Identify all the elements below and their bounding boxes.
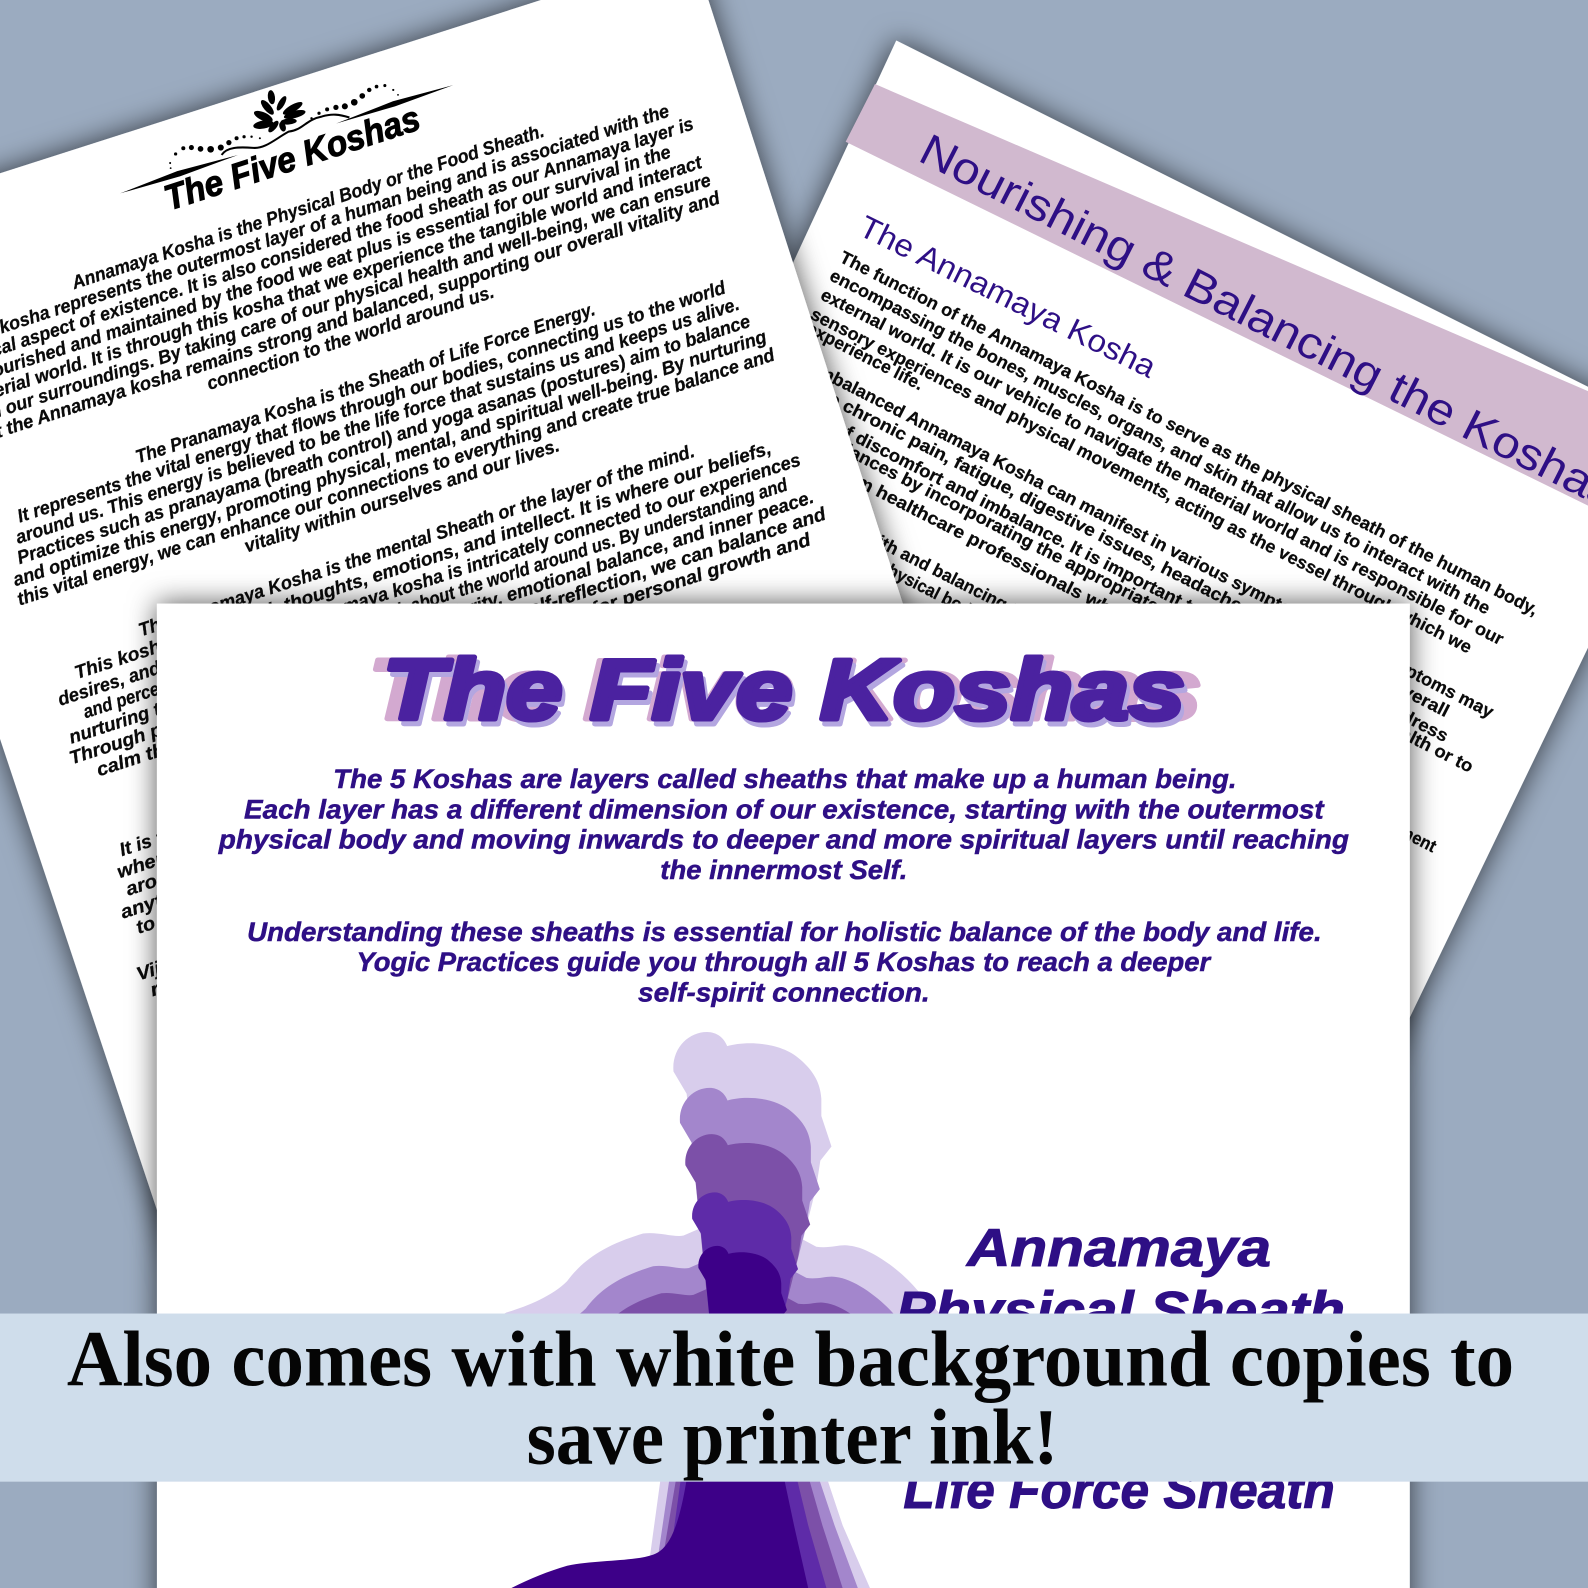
label: Life Force Sheath: Life Force Sheath (903, 1461, 1335, 1520)
text blocks: kosha descriptions: Through practices like meditation, breathwork and self-reflection, we can balance and (67, 503, 829, 768)
silhouette layer 5: darkest (506, 1246, 866, 1588)
text block: Annamaya function and imbalance: An imbalanced Annamaya Kosha can manifest in various symptoms. These symptoms may (784, 345, 1497, 722)
label: Annamaya Physical Sheath: Annamaya (965, 1219, 1271, 1278)
text blocks: kosha descriptions: Annamaya Kosha is the Physical Body or the Food Sheath. (68, 120, 547, 293)
text blocks: kosha descriptions: The Manomaya Kosha is the mental Sheath or the layer of the mind. (136, 440, 697, 640)
text blocks: kosha descriptions: It is the layer of wisdom, intuition and higher knowledge that guides us through life (117, 607, 842, 860)
text blocks: kosha descriptions: anything that clouds our judgement can then be seen clearly and gently released (118, 658, 878, 923)
silhouette layer 2 (478, 1088, 944, 1588)
text block: introduction: the innermost Self. (660, 855, 907, 885)
text blocks: kosha descriptions: Vijnanamaya Kosha is cultivated through meditation and daily self-inquiry practice (134, 717, 901, 984)
subheading: The Annamaya Kosha: The Annamaya Kosha (854, 209, 1162, 385)
panel: front page (157, 604, 1410, 1588)
text block: introduction: Yogic Practices guide you through all 5 Koshas to reach a deeper (356, 947, 1212, 977)
text block: Annamaya function and imbalance: external world. It is our vehicle to navigate the material world and is responsible for our (818, 285, 1507, 649)
text blocks: kosha descriptions: connection to the world around us. (204, 281, 497, 394)
text block: introduction: self-spirit connection. (638, 978, 930, 1008)
text block: Annamaya function and imbalance: Getting in contact with and balancing the Annamaya Kosha is essential for well-being (725, 456, 1366, 795)
page heading: The Five Koshas: The Five Koshas (159, 98, 425, 218)
text block: Annamaya function and imbalance: sensory experiences and physical movements, acting as the vessel through which we (807, 304, 1475, 657)
text blocks: kosha descriptions: to guide us closer to our authentic inner knowing and to our highest true purpose (133, 679, 874, 938)
banner: white background copies note: save printer ink! (527, 1394, 1058, 1481)
text blocks: kosha descriptions: nurturing this layer, we can cultivate mental clarity, emotional balance, and inner peace. (66, 486, 816, 748)
text blocks: kosha descriptions: Practices such as pranayama (breath control) and yoga asanas (postures) aim to balance (14, 310, 753, 568)
text blocks: kosha descriptions: reaching a deeper awareness of who we are and how we relate to all of life (147, 738, 899, 1000)
text block: Annamaya function and imbalance: through caring for our physical body, healthy food, movement, rest and daily care brings contentment (715, 474, 1440, 856)
label: Annamaya Physical Sheath: Physical Sheath (896, 1282, 1345, 1341)
banner: white background copies note (0, 1314, 1588, 1482)
panel: nourishing and balancing page (304, 41, 1588, 1450)
text blocks: kosha descriptions: and optimize this energy, promoting physical, mental, and spiritual well-being. By nurturing (10, 326, 769, 590)
title: The Five Koshas: The Five Koshas (369, 643, 1201, 738)
text blocks: kosha descriptions: The Pranamaya Kosha is the Sheath of Life Force Energy. (133, 298, 598, 467)
figure: layered body silhouettes (446, 1032, 972, 1588)
text block: introduction: Each layer has a different dimension of our existence, starting with the outermost (244, 794, 1325, 824)
banner: white background copies note: Also comes with white background copies to (67, 1316, 1514, 1403)
text block: Annamaya function and imbalance: feelings of discomfort and imbalance. It is important to listen to our body and address (765, 383, 1452, 746)
label: Annamaya Physical Sheath (896, 1219, 1345, 1341)
text blocks: kosha descriptions: around us and gain the insight to see beyond the mind and the limits of the ego (123, 642, 860, 900)
panel: the five koshas text page (0, 0, 1100, 1588)
pink title band (846, 84, 1588, 522)
text blocks: kosha descriptions: calm the mind, quieten our thoughts and create space for personal growth and (94, 528, 814, 780)
text blocks: kosha descriptions: this vital energy, we can enhance our connections to everything and create true balance and (14, 344, 777, 609)
text block: introduction (218, 764, 1349, 1008)
title: The Five Koshas: The Five Koshas (383, 643, 1185, 738)
text blocks: kosha descriptions: This kosha is filled with thoughts, emotions, and intellect. It is where our beliefs, (72, 437, 774, 683)
page heading: Nourishing and Balancing the Koshas: Nourishing & Balancing the Koshas (912, 125, 1588, 519)
text block: Annamaya function and imbalance: seek help from healthcare professionals when needed. (746, 416, 1206, 664)
text blocks: kosha descriptions: around us. This energy is believed to be the life force that sustains us and keeps us alive. (13, 293, 742, 548)
ornament: flower and dotted flourish (120, 84, 453, 193)
text blocks: kosha descriptions (0, 73, 907, 1003)
text blocks: kosha descriptions: nourished and maintained by the food we eat plus is essential for our survival in the (0, 141, 673, 384)
text block: Annamaya function and imbalance: experience life. (803, 318, 927, 394)
text block: Annamaya function and imbalance: include chronic pain, fatigue, digestive issues, headaches, and a decline in overall (775, 362, 1453, 721)
text block: Annamaya function and imbalance: The function of the Annamaya Kosha is to serve as the physical sheath of the human body, (837, 247, 1542, 619)
text block: introduction: physical body and moving inwards to deeper and more spiritual layers until reaching (218, 825, 1349, 855)
title: The Five Koshas: The Five Koshas (386, 648, 1188, 743)
text block: Annamaya function and imbalance: these imbalances by incorporating the appropriate practices and nurturing our health or to (756, 396, 1477, 777)
text block: Annamaya function and imbalance: encompassing the bones, muscles, organs, and skin that allow us to interact with the (827, 265, 1494, 618)
silhouette layer 1: lightest (446, 1032, 972, 1588)
text blocks: kosha descriptions: It represents the vital energy that flows through our bodies, connecting us to the world (15, 277, 729, 526)
silhouette layer 4 (540, 1192, 892, 1588)
text blocks: kosha descriptions: and perceptions, shaping the way we think about the world around us. By understanding and (80, 474, 790, 722)
text blocks: kosha descriptions: when we connect with this sheath we gain clarity about ourselves and the world (114, 623, 857, 882)
silhouette layer 3 (505, 1134, 921, 1588)
text block: introduction: The 5 Koshas are layers called sheaths that make up a human being. (333, 764, 1237, 794)
text blocks: kosha descriptions: desires, and values live. The Manomaya kosha is intricately connected to our experiences (55, 449, 803, 710)
text blocks: kosha descriptions: vitality within ourselves and our lives. (242, 434, 562, 556)
text block: introduction: Understanding these sheaths is essential for holistic balance of the body and life. (247, 917, 1322, 947)
text block: Annamaya function and imbalance (715, 247, 1542, 856)
